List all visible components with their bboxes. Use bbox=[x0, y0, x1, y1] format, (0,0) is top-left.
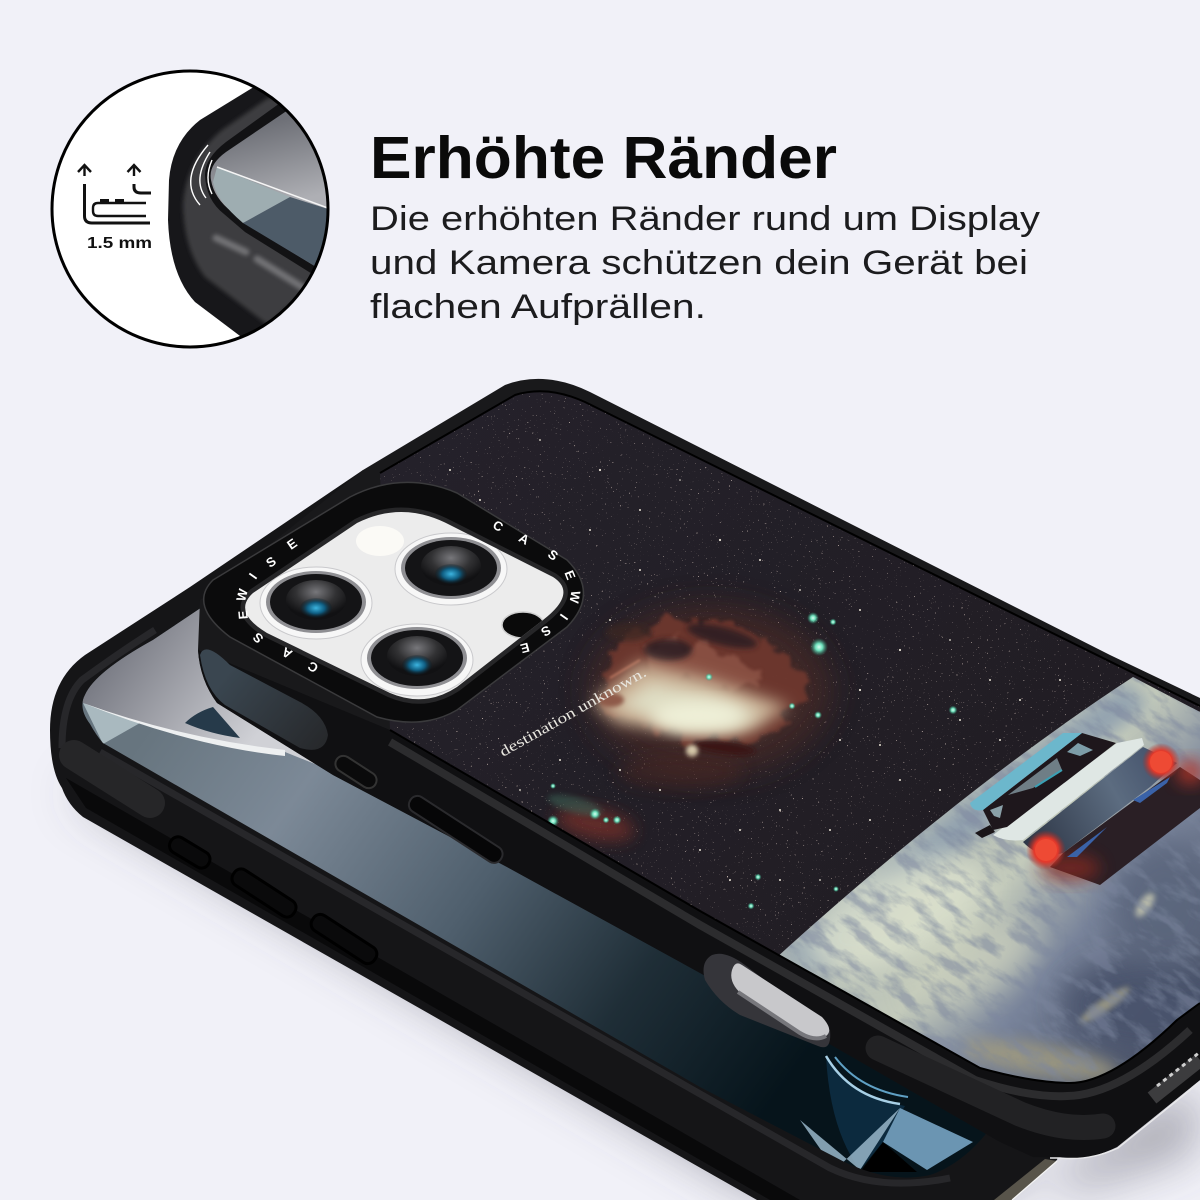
camera plate bbox=[230, 490, 590, 720]
ring lettering CASEWISE: I bbox=[557, 611, 571, 623]
lens: left bbox=[260, 567, 372, 639]
earth bbox=[780, 677, 1200, 1082]
back phone left grip panel bbox=[74, 755, 150, 803]
body text bbox=[370, 200, 1041, 326]
ring lettering CASEWISE: I bbox=[246, 570, 260, 582]
front phone rim highlight bbox=[1050, 1088, 1192, 1160]
front phone side wall bbox=[198, 650, 1200, 1158]
back phone buttons bbox=[167, 834, 380, 967]
heading: Erhöhte Ränder bbox=[370, 125, 837, 191]
camera ring bbox=[204, 482, 584, 722]
charging port: silver button bbox=[704, 954, 830, 1047]
ring lettering CASEWISE: W bbox=[233, 586, 251, 603]
back phone lower right silver edge bbox=[994, 1159, 1057, 1200]
icon: raised edge diagram bbox=[78, 165, 151, 223]
front face rim line bbox=[380, 391, 1200, 1083]
back phone screen bbox=[82, 608, 986, 1178]
body text: Die erhöhten Ränder rund um Display bbox=[370, 200, 1041, 238]
car tail lights bbox=[1026, 830, 1066, 870]
mute switch bbox=[334, 755, 378, 789]
phone artwork bbox=[50, 379, 1200, 1200]
teal stars bbox=[547, 612, 958, 910]
back phone bbox=[50, 470, 1100, 1200]
ring lettering CASEWISE: A bbox=[516, 530, 532, 548]
front phone left grip panel bbox=[200, 649, 328, 750]
ring lettering CASEWISE: E bbox=[284, 535, 300, 553]
stars bbox=[449, 439, 1061, 881]
ring lettering CASEWISE: W bbox=[566, 590, 583, 605]
nebula bbox=[546, 604, 832, 847]
phone corner close-up bbox=[168, 82, 328, 345]
lens: bottom bbox=[361, 624, 473, 696]
car cabin bbox=[983, 733, 1116, 830]
front phone body bbox=[198, 379, 1200, 1158]
camera ring inner bevel bbox=[245, 512, 563, 699]
screen wallpaper swoosh bbox=[826, 1056, 905, 1170]
body text: flachen Aufprällen. bbox=[370, 288, 706, 326]
ring lettering CASEWISE: S bbox=[538, 622, 554, 640]
back phone frame bbox=[50, 470, 1100, 1200]
detail circle: raised edge close-up bbox=[52, 71, 328, 347]
phone shadows bbox=[70, 760, 1195, 1195]
power button bbox=[406, 793, 506, 866]
front phone printed back bbox=[380, 392, 1200, 1082]
ring lettering CASEWISE: S bbox=[545, 546, 561, 564]
camera flash bbox=[356, 526, 404, 556]
camera bump bbox=[204, 482, 590, 722]
printed space background bbox=[380, 392, 1200, 954]
car bbox=[970, 733, 1200, 885]
ring lettering CASEWISE: A bbox=[279, 644, 295, 662]
lens: right bbox=[395, 533, 507, 605]
ring lettering CASEWISE bbox=[233, 517, 583, 676]
front phone bbox=[198, 379, 1200, 1200]
car blue glass strip bbox=[970, 733, 1082, 810]
front phone bottom grip panel bbox=[878, 1048, 1103, 1128]
front phone speaker band bbox=[1152, 1060, 1200, 1098]
ring lettering CASEWISE: E bbox=[519, 640, 531, 656]
starfield speckle bbox=[380, 394, 1200, 950]
car rear panel bbox=[1023, 747, 1177, 855]
ring lettering CASEWISE: S bbox=[249, 629, 266, 646]
body text: und Kamera schützen dein Gerät bei bbox=[370, 244, 1028, 282]
ring lettering CASEWISE: C bbox=[490, 517, 506, 535]
car underside shadow bbox=[1050, 767, 1200, 885]
car white band bbox=[993, 738, 1144, 840]
ring lettering CASEWISE: E bbox=[235, 610, 251, 620]
microphone hole bbox=[502, 612, 544, 638]
printed slogan: destination unknown. bbox=[497, 665, 649, 760]
lower small nebula bbox=[553, 801, 637, 847]
label: 1.5 mm: 1.5 mm bbox=[87, 235, 152, 252]
ring lettering CASEWISE: E bbox=[561, 568, 579, 582]
ring lettering CASEWISE: C bbox=[305, 658, 321, 676]
ring lettering CASEWISE: S bbox=[263, 553, 279, 571]
